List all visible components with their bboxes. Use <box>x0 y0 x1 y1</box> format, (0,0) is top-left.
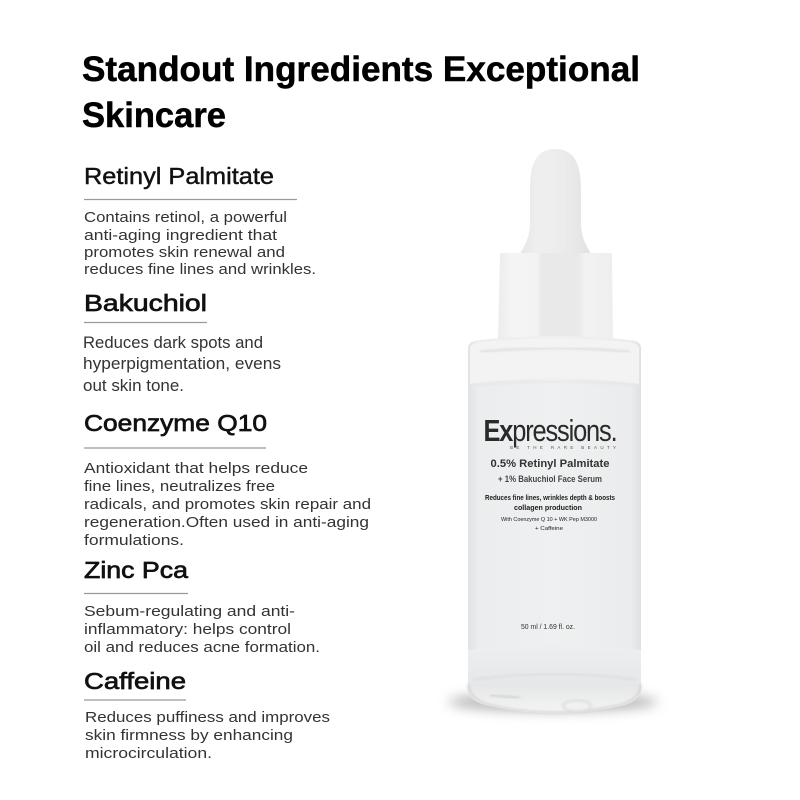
glass base <box>468 645 641 714</box>
claim: Reduces fine lines, wrinkles depth & boosts <box>485 495 615 502</box>
description: Coenzyme Q10: radicals, and promotes skin repair and <box>84 496 371 513</box>
brand logo: Expressions. <box>484 413 616 448</box>
description: Retinyl Palmitate: anti-aging ingredient that <box>84 227 278 244</box>
claim <box>485 495 615 512</box>
description: Retinyl Palmitate: Contains retinol, a powerful <box>84 209 287 226</box>
title <box>82 50 640 135</box>
ingredient: Coenzyme Q10 <box>84 410 371 549</box>
description: Coenzyme Q10: formulations. <box>84 532 184 549</box>
bottle shadow <box>448 693 658 711</box>
description: Bakuchiol: out skin tone. <box>83 377 184 395</box>
heading: Zinc Pca: Zinc Pca <box>84 557 189 583</box>
dropper bulb <box>520 149 591 254</box>
description: Coenzyme Q10: Antioxidant that helps reduce <box>84 460 308 477</box>
description: Zinc Pca: Sebum-regulating and anti- <box>84 603 295 620</box>
ingredient: Retinyl Palmitate <box>84 163 316 278</box>
description: Bakuchiol: Reduces dark spots and <box>83 334 263 352</box>
description: Caffeine <box>85 709 330 762</box>
heading: Bakuchiol: Bakuchiol <box>84 290 207 316</box>
product name: 0.5% Retinyl Palmitate <box>490 458 610 470</box>
description: Zinc Pca: oil and reduces acne formation. <box>84 639 320 656</box>
description: Zinc Pca: inflammatory: helps control <box>84 621 291 638</box>
ingredients note: + Caffeine <box>535 526 563 532</box>
ingredient: Caffeine <box>84 668 330 762</box>
description: Bakuchiol <box>83 334 281 395</box>
description: Retinyl Palmitate <box>84 209 316 278</box>
ingredient: Bakuchiol <box>83 290 281 395</box>
glass bottle body <box>468 336 641 714</box>
title: Skincare <box>82 96 226 135</box>
description: Coenzyme Q10: fine lines, neutralizes free <box>84 478 275 495</box>
heading: Retinyl Palmitate: Retinyl Palmitate <box>84 163 274 189</box>
description: Coenzyme Q10: regeneration.Often used in anti-aging <box>84 514 369 531</box>
description: Zinc Pca <box>84 603 320 656</box>
description: Retinyl Palmitate: reduces fine lines and wrinkles. <box>84 261 316 278</box>
heading: Coenzyme Q10: Coenzyme Q10 <box>84 410 267 436</box>
description: Bakuchiol: hyperpigmentation, evens <box>83 355 281 373</box>
ingredients note <box>501 517 597 532</box>
volume: 50 ml / 1.69 fl. oz. <box>521 624 575 631</box>
description: Caffeine: skin firmness by enhancing <box>85 727 293 744</box>
claim: collagen production <box>514 505 582 512</box>
heading: Caffeine: Caffeine <box>84 668 186 694</box>
glass shoulder <box>470 338 639 386</box>
description: Coenzyme Q10 <box>84 460 371 549</box>
description: Retinyl Palmitate: promotes skin renewal and <box>84 244 285 261</box>
product subtitle: + 1% Bakuchiol Face Serum <box>498 474 602 484</box>
tagline: BE THE RARE BEAUTY <box>510 445 616 450</box>
title: Standout Ingredients Exceptional <box>82 50 640 89</box>
ingredients note: With Coenzyme Q 10 + WK Pep M3000 <box>501 517 597 523</box>
product: serum bottle <box>448 149 658 714</box>
dropper collar <box>498 253 613 340</box>
description: Caffeine: Reduces puffiness and improves <box>85 709 330 726</box>
bottle label <box>484 413 616 631</box>
ingredient: Zinc Pca <box>84 557 320 656</box>
description: Caffeine: microcirculation. <box>85 745 212 762</box>
